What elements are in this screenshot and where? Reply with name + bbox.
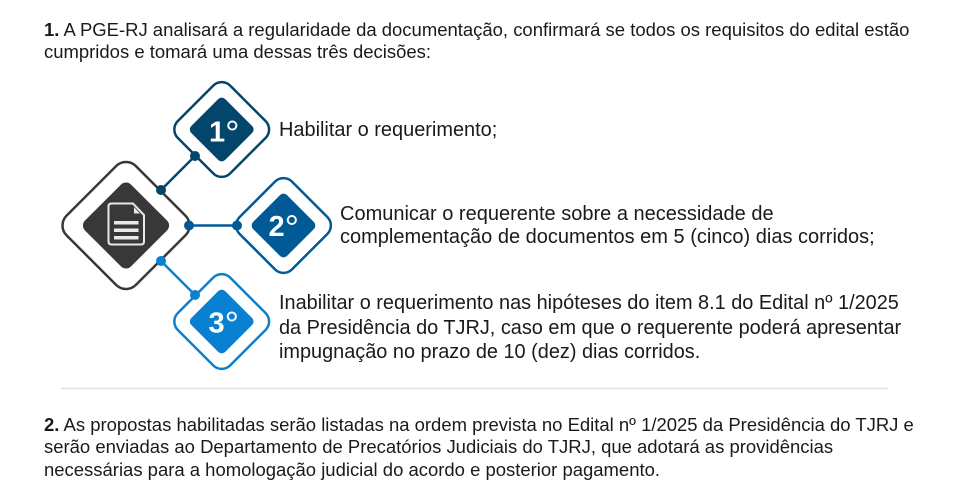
paragraph 1: cumpridos e tomará uma dessas três decisões: — [44, 41, 431, 62]
connector 2 — [184, 220, 242, 230]
option 2 text: complementação de documentos em 5 (cinco) dias corridos; — [340, 226, 875, 248]
central document diamond — [57, 156, 195, 295]
option 1 text: Habilitar o requerimento; — [279, 119, 497, 141]
paragraph 1: 1. A PGE-RJ analisará a regularidade da documentação, confirmará se todos os requisitos do edital estão — [44, 19, 909, 40]
connector 3 — [156, 256, 200, 300]
diamond 2: 2 — [268, 211, 285, 243]
option 3 text: da Presidência do TJRJ, caso em que o requerente poderá apresentar — [279, 316, 901, 338]
option 3 text: Inabilitar o requerimento nas hipóteses do item 8.1 do Edital nº 1/2025 — [279, 292, 899, 314]
diamond 1 — [169, 77, 274, 182]
paragraph 2: 2. As propostas habilitadas serão listadas na ordem prevista no Edital nº 1/2025 da Presidência do TJRJ e — [44, 414, 914, 434]
option 2 text — [340, 203, 875, 248]
diamond 1: 1 — [209, 116, 225, 148]
diamond 3: 3 — [208, 307, 225, 339]
option 3 text — [279, 292, 901, 363]
icon: document — [108, 204, 144, 244]
paragraph 2: necessárias para a homologação judicial do acordo e posterior pagamento. — [44, 458, 660, 480]
paragraph 2: serão enviadas ao Departamento de Precatórios Judiciais do TJRJ, que adotará as providências — [44, 436, 833, 457]
paragraph 1 — [44, 19, 909, 62]
paragraph 2 — [44, 414, 914, 480]
option 2 text: Comunicar o requerente sobre a necessidade de — [340, 203, 774, 225]
connector 1 — [156, 151, 200, 195]
diamond 3: ° — [225, 303, 239, 344]
diamond 2: ° — [285, 207, 299, 248]
diamond 3 — [169, 269, 274, 374]
diamond 2 — [231, 173, 336, 278]
diamond 1: ° — [225, 112, 240, 154]
option 3 text: impugnação no prazo de 10 (dez) dias corridos. — [279, 341, 700, 363]
